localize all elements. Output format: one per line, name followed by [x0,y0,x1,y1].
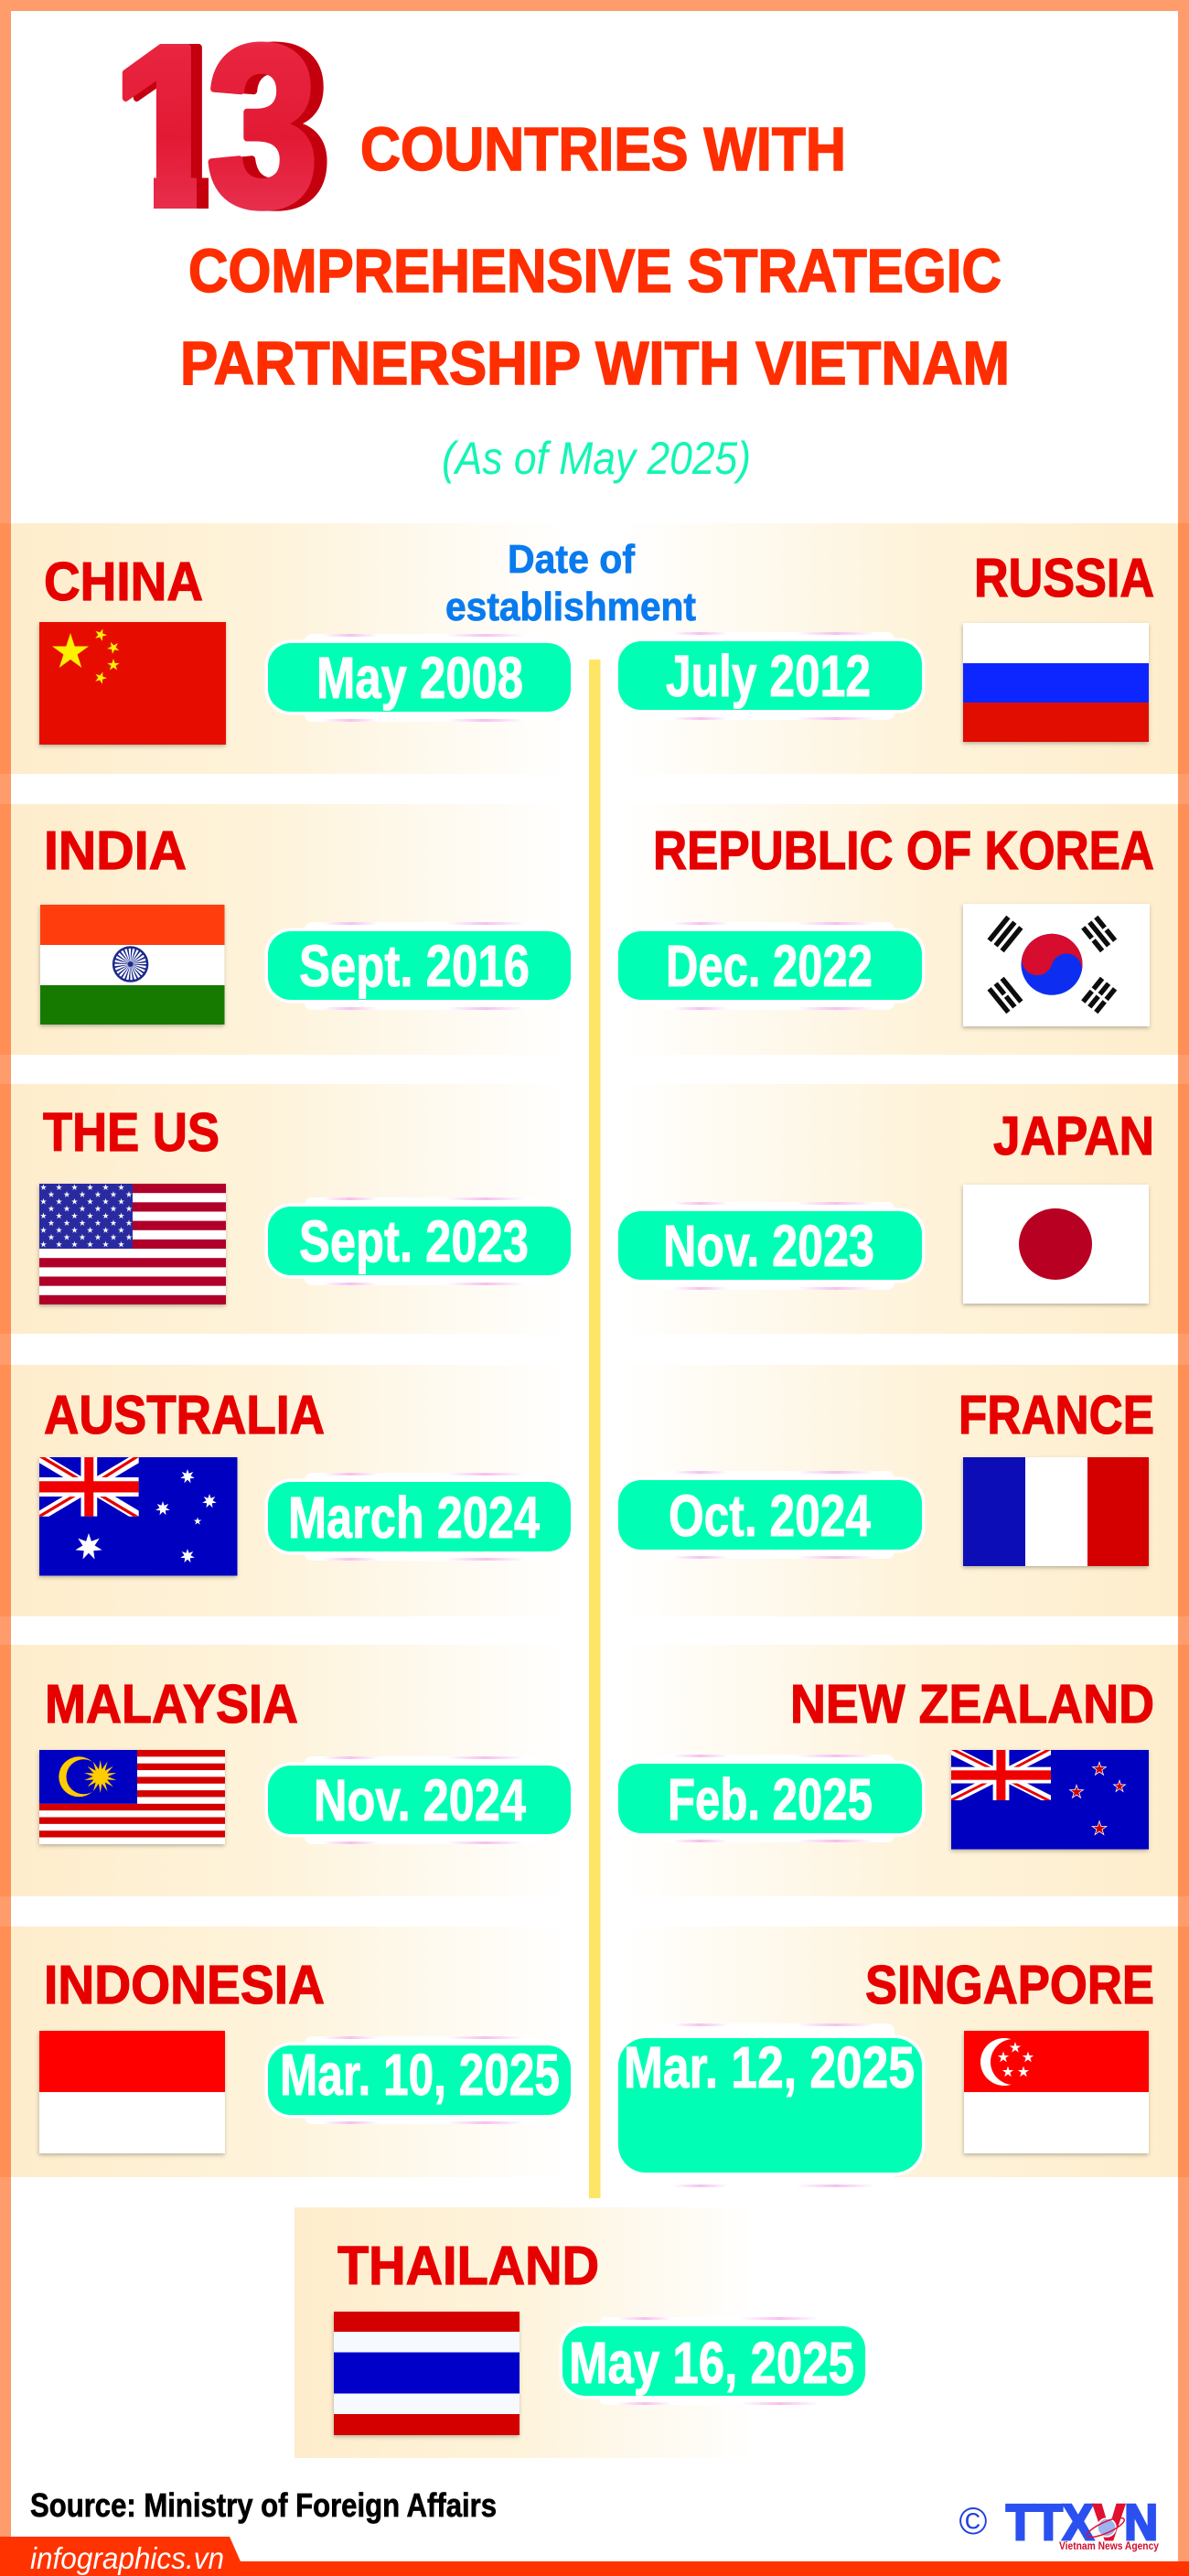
flag: Russia [963,623,1149,742]
flag: Republic of Korea [963,904,1150,1026]
flag: Singapore [964,2031,1149,2153]
date pill: Nov. 2023 [618,1202,922,1290]
date pill: Sept. 2023 [268,1197,571,1285]
flag: Malaysia [39,1750,225,1844]
panel: Indonesia: INDONESIA [44,1955,325,2015]
panel: China [11,523,585,774]
flag: Japan [963,1185,1149,1304]
date pill: March 2024 [268,1473,571,1561]
flag: China [39,622,226,745]
date pill: Mar. 10, 2025: Mar. 10, 2025 [280,2042,560,2108]
big number 13: 3 [207,0,318,253]
flag: Thailand [334,2312,520,2435]
footer bar: infographics.vn [30,2541,224,2575]
date pill: Feb. 2025 [618,1755,922,1842]
flag: Indonesia [39,2031,225,2153]
panel: Republic of Korea [604,804,1178,1055]
title: PARTNERSHIP WITH VIETNAM [180,329,1010,398]
date pill: March 2024: March 2024 [288,1485,540,1551]
date pill: Mar. 10, 2025 [268,2036,571,2124]
date pill: May 16, 2025: May 16, 2025 [569,2330,854,2396]
copyright symbol: © [959,2499,988,2542]
panel: Japan [604,1084,1178,1334]
date pill: Feb. 2025: Feb. 2025 [668,1766,873,1832]
panel: Thailand: THAILAND [337,2236,599,2296]
date pill: Oct. 2024 [618,1471,922,1559]
flag: United States [39,1184,226,1304]
panel: Malaysia: MALAYSIA [45,1674,298,1734]
big number 13 [123,42,327,211]
date pill: Sept. 2016 [268,922,571,1010]
date pill: Mar. 12, 2025: Mar. 12, 2025 [624,2034,915,2100]
heading: date of establishment [445,537,696,629]
big number 13: 1 [112,0,226,253]
heading: date of establishment: Date of [508,537,635,582]
date pill: Dec. 2022: Dec. 2022 [666,933,873,999]
flag: France [963,1457,1149,1566]
flag: India [40,905,225,1025]
logo: TTXVN: Vietnam News Agency [1059,2539,1159,2552]
panel: The US: THE US [43,1102,220,1163]
panel: Indonesia [11,1927,585,2177]
subtitle: as of date: (As of May 2025) [442,433,751,484]
title: COMPREHENSIVE STRATEGIC [188,237,1002,306]
source note: Source: Ministry of Foreign Affairs [30,2486,497,2524]
panel: Russia: RUSSIA [974,548,1154,608]
panel: China: CHINA [44,552,203,612]
panel: Thailand [295,2207,865,2458]
title: COUNTRIES WITH [360,115,846,184]
panel: Malaysia [11,1645,585,1896]
footer bar [0,2537,1189,2576]
panel: The US [11,1084,585,1334]
date pill: Nov. 2023: Nov. 2023 [663,1213,874,1279]
panel: Australia [11,1365,585,1616]
date pill: Mar. 12, 2025 [618,2023,922,2188]
date pill: Nov. 2024: Nov. 2024 [314,1767,526,1833]
date pill: Sept. 2016: Sept. 2016 [299,933,530,999]
big number 13: 3 [220,0,331,253]
big number 13: 1 [123,0,237,253]
date pill: Dec. 2022 [618,922,922,1010]
panel: Australia: AUSTRALIA [44,1385,325,1445]
flag: New Zealand [951,1748,1149,1850]
date pill: July 2012: July 2012 [666,643,871,709]
panel: Singapore: SINGAPORE [865,1955,1154,2015]
panel: France [604,1365,1178,1616]
timeline line [589,660,600,2198]
date pill: Nov. 2024 [268,1756,571,1844]
date pill: Oct. 2024: Oct. 2024 [669,1483,871,1549]
panel: Russia [604,523,1178,774]
flag: Australia [39,1455,238,1575]
panel: New Zealand [604,1645,1178,1896]
heading: date of establishment: establishment [445,585,696,629]
panel: Japan: JAPAN [993,1106,1154,1166]
date pill: Sept. 2023: Sept. 2023 [299,1208,529,1274]
date pill: May 2008: May 2008 [316,645,523,711]
logo: TTXVN: TTXVN [1006,2494,1158,2550]
date pill: May 2008 [268,634,571,722]
panel: France: FRANCE [959,1385,1154,1445]
panel: New Zealand: NEW ZEALAND [790,1674,1154,1734]
panel: India [11,804,585,1055]
date pill: July 2012 [618,632,922,720]
panel: India: INDIA [44,821,187,881]
title [180,115,1010,398]
panel: Singapore [604,1927,1178,2188]
date pill: May 16, 2025 [562,2317,865,2405]
